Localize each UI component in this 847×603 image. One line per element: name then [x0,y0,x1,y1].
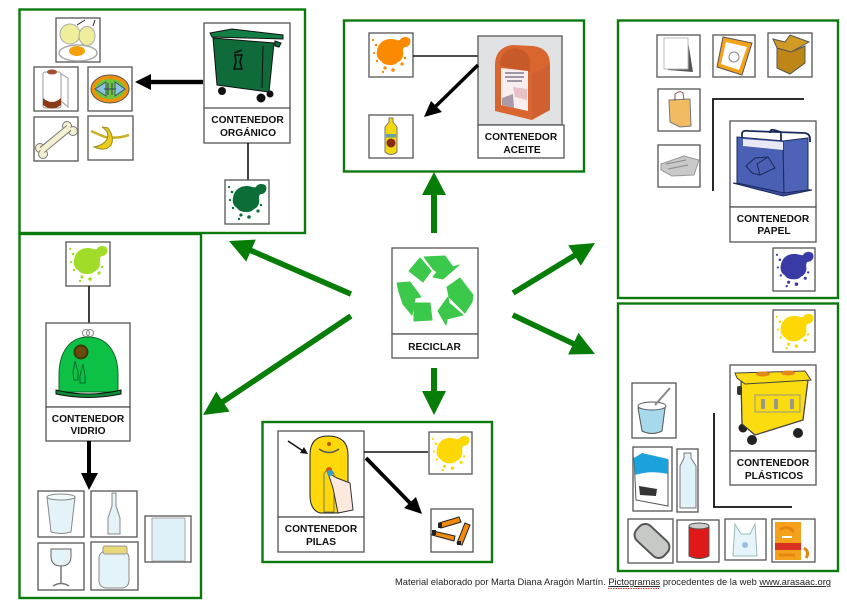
icon: green splat [225,180,269,224]
label: contenedor vidrio: VIDRIO [70,426,106,437]
icon: plastic bag [725,519,766,560]
icon: yogurt [632,383,676,438]
icon: yellow splat [773,310,815,352]
panel: reciclar [392,248,478,358]
icon: fish waste [88,67,132,111]
icon: banana peel [88,116,133,160]
connector: container to colour [247,143,249,180]
label: contenedor plásticos: CONTENEDOR [737,458,810,469]
arrow: to aceite [422,172,446,233]
label: contenedor orgánico: ORGÁNICO [220,126,276,139]
arrow: to orgánico [224,230,356,305]
label: contenedor plásticos: PLÁSTICOS [745,469,803,482]
icon: paper container [730,121,816,207]
icon: soda can [677,520,719,562]
panel: contenedor vidrio [20,234,201,598]
arrow: container to glass items [81,441,98,490]
label: contenedor papel: CONTENEDOR [737,214,810,225]
icon: glass bottle [91,491,137,537]
icon: oil bottle [369,115,413,158]
icon: organic container [204,23,290,109]
icon: orange splat [369,33,413,77]
panel: contenedor aceite [344,20,584,172]
icon: battery container [278,431,364,517]
icon: blue splat [773,248,815,291]
icon: eggs [56,18,100,62]
label: contenedor vidrio [46,407,130,441]
connector: items to container [714,413,792,507]
icon: magazine [713,35,755,77]
arrow: container to batteries [366,458,422,514]
connector: colour to container [88,286,90,323]
panel: contenedor papel [618,20,838,298]
label: reciclar: RECICLAR [408,342,461,353]
label: contenedor orgánico: CONTENEDOR [211,115,284,126]
label: contenedor orgánico [204,108,290,143]
icon: paper bag [658,89,700,131]
connector: container to colour [364,451,428,453]
icon: drinking glass [38,491,84,537]
label: contenedor plásticos [730,451,816,485]
label: contenedor vidrio: CONTENEDOR [52,414,125,425]
arrow: to vidrio [196,306,358,425]
icon: milk carton [633,447,672,511]
connector: colour to container [413,55,478,57]
arrow: container to oil bottle [424,65,478,117]
label: contenedor pilas [278,517,364,552]
panel: contenedor plásticos [618,304,838,571]
arrow: to plásticos [508,304,600,365]
icon: oil container photo [478,36,562,125]
icon: sardine tin [628,519,673,563]
label: contenedor aceite [478,125,564,158]
label: contenedor papel: PAPEL [757,226,791,237]
icon: plastics container [730,365,816,451]
arrow: to papel [507,233,601,303]
icon: newspaper [658,145,700,187]
icon: window pane [145,516,191,562]
icon: batteries [431,509,473,552]
icon: jar [91,542,138,590]
icon: yellow splat [429,432,472,474]
label: contenedor papel [730,207,816,242]
icon: water bottle [677,449,698,512]
icon: bone [34,117,78,161]
icon: paper towel [34,67,78,111]
arrow: to pilas [422,368,446,415]
label: contenedor aceite: ACEITE [503,145,541,156]
footer credit: Material elaborado por Marta Diana Aragón Martín. Pictogramas procedentes de la web www.arasaac.org [395,576,831,587]
icon: lime splat [66,242,110,286]
connector: items to container [713,99,804,191]
panel: contenedor orgánico [20,10,305,233]
arrow: container to items [135,74,203,90]
icon: wine glass [38,543,84,590]
icon: snack bag [772,519,815,562]
label: contenedor pilas: PILAS [306,537,336,548]
icon: recycle symbol [397,256,473,325]
panel: contenedor pilas [262,422,492,562]
icon: glass igloo container [46,323,130,407]
icon: cardboard box [768,33,812,77]
icon: paper sheets [657,35,700,77]
label: contenedor aceite: CONTENEDOR [485,132,558,143]
label: contenedor pilas: CONTENEDOR [285,524,358,535]
